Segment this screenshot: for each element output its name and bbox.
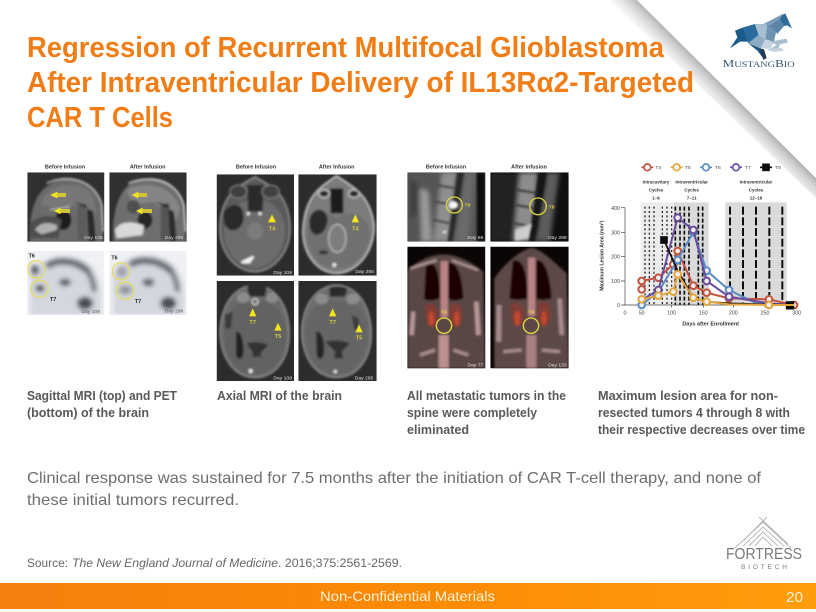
image: PET-CT before: Day 77 xyxy=(468,362,484,368)
axis tick labels: 100 xyxy=(667,310,676,316)
logo: Fortress Biotech xyxy=(726,517,802,571)
clinical response text xyxy=(27,470,762,509)
legend: T7 xyxy=(745,165,751,171)
image: spine MRI before: T8 xyxy=(465,203,471,209)
image: sagittal MRI after: Day 295 xyxy=(165,235,184,241)
cycle labels: Intraventricular xyxy=(675,179,708,184)
icon: horse xyxy=(730,13,792,60)
column heading: after: After Infusion xyxy=(130,164,166,170)
panel: spine MRI and PET-CT xyxy=(407,164,569,368)
legend: T4 xyxy=(655,165,661,171)
image: PET-CT after: T8 xyxy=(528,310,534,316)
image: PET after: T6 xyxy=(111,255,118,261)
series T5 xyxy=(638,271,794,308)
axis tick labels: 250 xyxy=(761,310,769,316)
wordmark subtitle: BIOTECH xyxy=(741,564,787,571)
axis tick labels: 50 xyxy=(639,310,645,316)
series T4 xyxy=(638,248,797,308)
series T7 xyxy=(642,214,794,305)
page number: 20 xyxy=(786,589,803,606)
image: axial MRI before bottom: T7 xyxy=(249,320,256,326)
image: spine MRI after xyxy=(490,172,569,242)
axis tick labels xyxy=(611,206,801,316)
cycle labels: Cycles xyxy=(749,187,764,192)
image: PET-CT after xyxy=(490,247,569,368)
axis tick labels: 400 xyxy=(611,206,620,212)
x axis title: Days after Enrollment xyxy=(682,322,739,328)
caption: chart xyxy=(598,389,805,437)
caption: sagittal: (bottom) of the brain xyxy=(27,406,149,420)
caption: spine: spine were completely xyxy=(407,406,537,420)
axis tick labels: 150 xyxy=(699,310,708,316)
panel: axial MRI xyxy=(217,164,377,381)
cycle labels: Intraventricular xyxy=(740,179,773,184)
y axis title: Maximum Lesion Area (mm²) xyxy=(599,220,605,291)
image: sagittal MRI after xyxy=(109,172,187,242)
footer bar xyxy=(0,583,816,609)
image: axial MRI before bottom xyxy=(217,281,294,381)
caption: spine: eliminated xyxy=(407,423,469,437)
image: PET before: T6 xyxy=(29,253,35,259)
image: spine MRI before: Day 86 xyxy=(468,235,484,241)
image: axial MRI before bottom: Day 108 xyxy=(273,375,292,381)
cycle labels xyxy=(643,179,773,200)
image: PET before: Day 109 xyxy=(81,309,100,315)
legend: T6 xyxy=(715,165,721,171)
image: PET-CT before: T8 xyxy=(441,310,447,316)
caption: sagittal: Sagittal MRI (top) and PET xyxy=(27,389,177,403)
image: spine MRI after: T8 xyxy=(549,204,555,210)
legend xyxy=(641,164,781,171)
image: PET after xyxy=(109,251,187,315)
image: axial MRI after top xyxy=(298,174,377,276)
caption: spine xyxy=(407,389,566,437)
image: axial MRI before top: Day 108 xyxy=(273,270,292,276)
shaded treatment cycles xyxy=(641,202,787,305)
image: axial MRI before top: T4 xyxy=(269,226,276,232)
axis tick labels: 300 xyxy=(611,230,620,236)
footer label: Non-Confidential Materials xyxy=(320,588,495,604)
clinical response text: these initial tumors recurred. xyxy=(27,492,239,509)
image: PET-CT before xyxy=(407,247,485,368)
page corner fold xyxy=(610,0,816,198)
treatment dose lines xyxy=(645,207,782,305)
image: PET after: T7 xyxy=(135,299,141,305)
caption: chart: their respective decreases over time xyxy=(598,423,805,437)
image: spine MRI after: Day 289 xyxy=(548,235,567,241)
axis tick labels: 100 xyxy=(611,279,620,285)
image: axial MRI after top: Day 295 xyxy=(355,269,374,275)
column heading: before: Before Infusion xyxy=(426,164,467,170)
title: Regression of Recurrent Multifocal Glioblastoma xyxy=(27,32,665,64)
clinical response text: Clinical response was sustained for 7.5 months after the initiation of CAR T-cell therapy, and none of xyxy=(27,470,762,487)
image: PET before: T7 xyxy=(50,297,56,303)
image: axial MRI after bottom xyxy=(298,281,377,381)
cycle labels: 12–16 xyxy=(750,195,763,200)
logo wordmark: MUSTANGBIO xyxy=(723,58,795,70)
caption: spine: All metastatic tumors in the xyxy=(407,389,566,403)
cycle labels: 1–6 xyxy=(652,195,660,200)
column heading: after: After Infusion xyxy=(511,164,547,170)
image: PET after: Day 298 xyxy=(165,308,184,314)
cycle labels: Cycles xyxy=(684,187,699,192)
legend: T8 xyxy=(775,165,781,171)
legend: T5 xyxy=(685,165,691,171)
image: PET-CT after: Day 133 xyxy=(548,362,567,368)
axis tick labels: 0 xyxy=(624,310,627,316)
axes xyxy=(621,208,797,308)
axis tick labels: 200 xyxy=(611,255,620,261)
icon: fortress lines xyxy=(735,517,791,548)
wordmark: FORTRESS xyxy=(726,546,802,563)
source citation: Source: xyxy=(27,556,68,570)
title xyxy=(27,32,694,134)
series T6 xyxy=(638,229,794,308)
source citation: The New England Journal of Medicine xyxy=(72,556,278,570)
image: axial MRI after bottom: T7 xyxy=(329,320,336,326)
image: axial MRI before bottom: T5 xyxy=(275,334,281,340)
caption: chart: Maximum lesion area for non- xyxy=(598,389,778,403)
cycle labels: Intracavitary xyxy=(643,179,670,184)
image: axial MRI after bottom: T5 xyxy=(356,335,362,341)
title: After Intraventricular Delivery of IL13Rα2-Targeted xyxy=(27,67,694,99)
column heading: after: After Infusion xyxy=(319,164,355,170)
logo: MustangBio xyxy=(723,13,795,70)
axis tick labels: 0 xyxy=(617,303,620,309)
column heading: before: Before Infusion xyxy=(236,164,277,170)
caption: chart: resected tumors 4 through 8 with xyxy=(598,406,790,420)
series T8 xyxy=(661,237,793,309)
title: CAR T Cells xyxy=(27,102,173,134)
axis tick labels: 200 xyxy=(729,310,738,316)
image: PET before xyxy=(27,251,104,315)
image: sagittal MRI before xyxy=(27,172,104,242)
chart: maximum lesion area xyxy=(599,164,801,328)
source citation xyxy=(27,556,402,570)
source citation: . 2016;375:2561-2569. xyxy=(278,556,402,570)
axis tick labels: 300 xyxy=(792,310,801,316)
cycle labels: Cycles xyxy=(649,187,664,192)
image: spine MRI before xyxy=(407,172,485,242)
panel: sagittal MRI and PET xyxy=(27,164,187,315)
caption: sagittal xyxy=(27,389,177,420)
caption: axial: Axial MRI of the brain xyxy=(217,389,342,403)
image: axial MRI after top: T4 xyxy=(352,226,359,232)
cycle labels: 7–11 xyxy=(687,195,697,200)
column heading: before: Before Infusion xyxy=(45,164,86,170)
image: sagittal MRI before: Day 108 xyxy=(84,235,103,241)
image: axial MRI before top xyxy=(217,174,294,276)
image: axial MRI after bottom: Day 295 xyxy=(355,375,374,381)
